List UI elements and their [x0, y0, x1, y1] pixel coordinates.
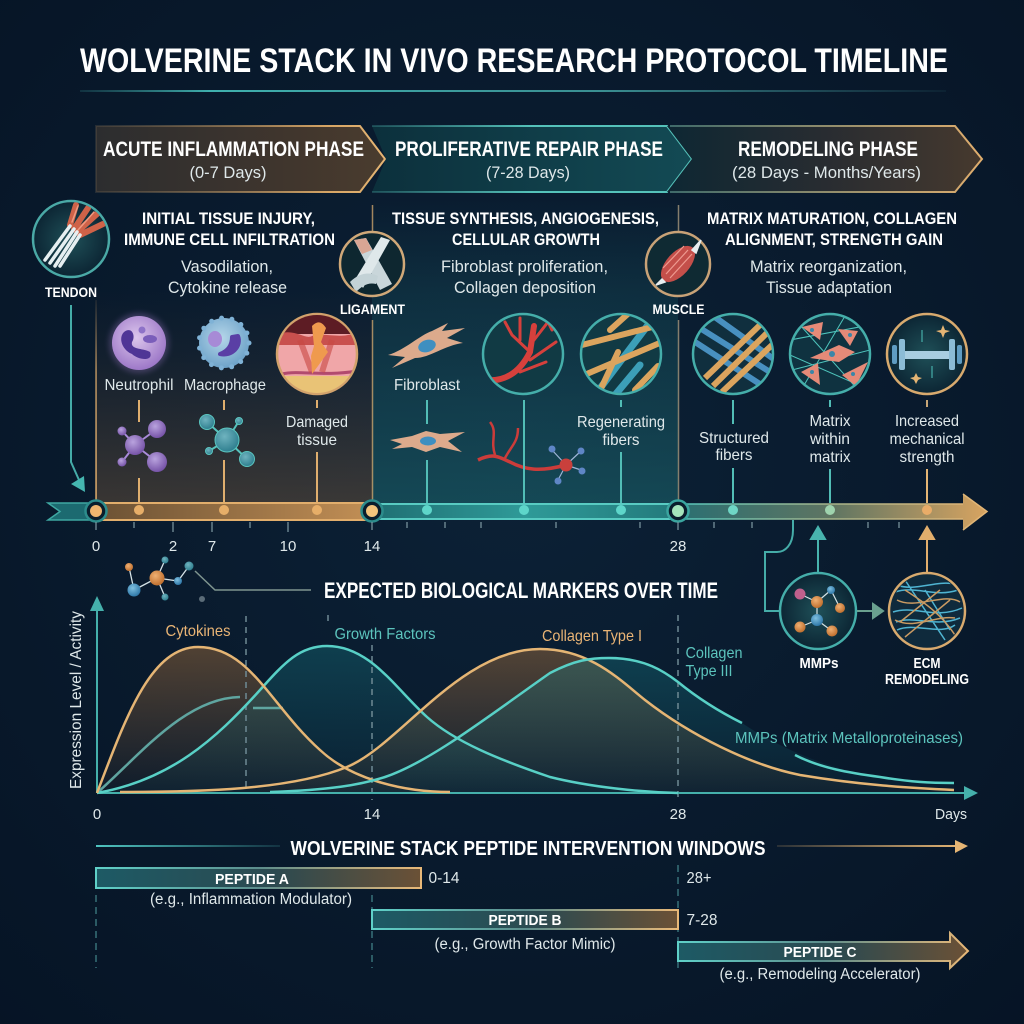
label: macrophage: Macrophage — [184, 377, 266, 394]
banner: acute inflammation phase — [96, 126, 385, 192]
panel: acute phase background — [96, 290, 372, 512]
icon: angiogenesis vessels — [483, 314, 563, 394]
curve: cytokines — [97, 647, 450, 793]
labels: x axis: 0 — [93, 806, 101, 823]
label: ECM remodeling: ECM — [914, 656, 940, 672]
labels: curves: MMPs (Matrix Metalloproteinases) — [735, 730, 963, 747]
text block: remodeling phase summary: Tissue adaptation — [766, 279, 892, 297]
labels: x axis: Days — [935, 806, 967, 823]
labels: timeline days: 28 — [670, 538, 686, 555]
label: fibroblast: Fibroblast — [394, 377, 461, 394]
labels: timeline days: 2 — [169, 538, 177, 555]
banner: remodeling phase: REMODELING PHASE — [738, 138, 918, 161]
icon: ECM remodeling — [889, 573, 965, 649]
banner: proliferative repair phase — [372, 126, 692, 192]
label: regenerating fibers: Regenerating — [577, 414, 665, 431]
label: muscle: MUSCLE — [652, 301, 704, 317]
labels: timeline days: 0 — [92, 538, 100, 555]
peptide B bar — [372, 910, 718, 953]
label: y axis: Expression Level / Activity — [68, 611, 85, 789]
label: MMPs: MMPs — [800, 656, 838, 672]
curve: collagen type III — [270, 658, 954, 792]
chart: biological markers over time — [68, 596, 978, 823]
icon: small molecule with leader line — [125, 556, 311, 602]
text block: acute phase summary: INITIAL TISSUE INJURY, — [142, 209, 315, 228]
label: damaged tissue: Damaged — [286, 414, 348, 431]
icon: fibroblast upper — [388, 323, 465, 368]
text block: proliferative phase summary: TISSUE SYNTHESIS, ANGIOGENESIS, — [392, 209, 659, 228]
labels: x axis: 28 — [670, 806, 686, 823]
peptide A bar — [96, 868, 460, 908]
text: fibers — [716, 447, 752, 464]
banner: acute inflammation phase: ACUTE INFLAMMATION PHASE — [103, 138, 364, 161]
heading: expected biological markers: EXPECTED BIOLOGICAL MARKERS OVER TIME — [324, 578, 718, 603]
banner: proliferative repair phase: (7-28 Days) — [486, 163, 570, 182]
icon: damaged tissue — [276, 312, 358, 396]
peptide C arrow bar: (e.g., Remodeling Accelerator) — [720, 966, 920, 983]
text block: proliferative phase summary: Fibroblast proliferation, — [441, 258, 608, 276]
arrow: MMPs up to timeline — [811, 527, 825, 572]
peptide A bar: 0-14 — [428, 870, 460, 887]
connector: timeline to MMPs — [765, 520, 793, 611]
text block: proliferative phase summary: Collagen deposition — [454, 279, 596, 297]
labels: timeline days: 7 — [208, 538, 216, 555]
arrow: tendon to day 0 — [71, 305, 85, 492]
text: strength — [900, 449, 954, 466]
text block: remodeling phase summary — [707, 209, 957, 297]
banner: acute inflammation phase: (0-7 Days) — [190, 163, 266, 182]
icon: tendon — [33, 201, 109, 277]
labels: curves: Collagen — [686, 645, 742, 662]
labels: timeline days: 14 — [364, 538, 380, 555]
labels: curves — [166, 623, 963, 747]
icon: MMPs — [780, 573, 856, 649]
peptide B bar: 7-28 — [686, 912, 718, 929]
text block: remodeling phase summary: Matrix reorganization, — [750, 258, 907, 276]
text block: acute phase summary — [124, 209, 335, 297]
peptide C arrow bar — [678, 933, 968, 983]
label: tendon: TENDON — [45, 284, 97, 300]
icon: matrix within matrix — [790, 314, 870, 394]
labels: x axis — [93, 806, 967, 823]
arrow: MMPs to ECM — [857, 604, 883, 618]
banner: remodeling phase: (28 Days - Months/Years) — [732, 163, 921, 182]
labels: timeline days: 10 — [280, 538, 296, 555]
label: increased mechanical strength: Increased — [895, 413, 959, 430]
icon: dumbbell strength — [887, 314, 967, 394]
icon: regenerating fibers — [581, 312, 662, 395]
label: structured fibers: Structured — [699, 430, 769, 447]
text: fibers — [602, 432, 640, 449]
labels: timeline days — [92, 538, 686, 555]
text block: remodeling phase summary: ALIGNMENT, STRENGTH GAIN — [725, 230, 943, 249]
icon: macrophage molecule — [200, 414, 254, 466]
icon: vessel with molecule — [478, 422, 586, 484]
heading: peptide intervention windows: WOLVERINE STACK PEPTIDE INTERVENTION WINDOWS — [290, 838, 766, 860]
label: ECM remodeling — [885, 656, 969, 688]
icon: fibroblast lower — [390, 431, 465, 452]
labels: curves: Cytokines — [166, 623, 230, 640]
label: ligament: LIGAMENT — [340, 301, 405, 317]
text: within — [809, 431, 850, 448]
text block: acute phase summary: Cytokine release — [168, 279, 287, 297]
text: mechanical — [890, 431, 964, 448]
peptide A bar: PEPTIDE A — [215, 871, 289, 888]
labels: curves: Collagen Type I — [542, 628, 642, 645]
peptide A bar: (e.g., Inflammation Modulator) — [150, 891, 352, 908]
icon: ligament — [340, 232, 404, 296]
icon: structured fibers — [692, 314, 775, 394]
banner: proliferative repair phase: PROLIFERATIVE REPAIR PHASE — [395, 138, 663, 161]
axes — [90, 596, 978, 800]
icon: neutrophil — [109, 313, 169, 373]
banner: remodeling phase — [667, 126, 982, 192]
peptide B bar: (e.g., Growth Factor Mimic) — [434, 936, 616, 953]
text block: acute phase summary: Vasodilation, — [181, 258, 273, 276]
heading: peptide intervention windows — [96, 838, 968, 860]
curve: growth factors — [97, 646, 678, 793]
label: neutrophil: Neutrophil — [104, 377, 174, 394]
icon: muscle — [646, 232, 710, 296]
text: matrix — [810, 449, 850, 466]
curve: inner marker — [97, 697, 283, 793]
text block: remodeling phase summary: MATRIX MATURATION, COLLAGEN — [707, 209, 957, 228]
label: ECM remodeling: REMODELING — [885, 672, 969, 688]
label: matrix within matrix: Matrix — [810, 413, 850, 430]
peptide C arrow bar: PEPTIDE C — [784, 944, 857, 961]
connector stems — [139, 400, 927, 503]
labels: curves: Type III — [686, 663, 732, 680]
text block: proliferative phase summary: CELLULAR GROWTH — [452, 230, 600, 249]
text block: proliferative phase summary — [392, 209, 659, 297]
curve fills — [97, 646, 954, 793]
text: tissue — [297, 432, 337, 449]
panel: proliferative phase background — [372, 200, 678, 512]
timeline axis — [48, 494, 987, 532]
peptide B bar: PEPTIDE B — [488, 912, 562, 929]
labels: x axis: 14 — [364, 806, 380, 823]
icon: neutrophil molecule — [118, 420, 167, 472]
arrow: ECM up to timeline — [920, 527, 934, 572]
icon: macrophage — [199, 318, 249, 368]
curve: collagen type I — [120, 649, 954, 792]
text block: acute phase summary: IMMUNE CELL INFILTRATION — [124, 230, 335, 249]
label: 28+ window: 28+ — [686, 870, 712, 887]
labels: curves: Growth Factors — [334, 626, 436, 643]
